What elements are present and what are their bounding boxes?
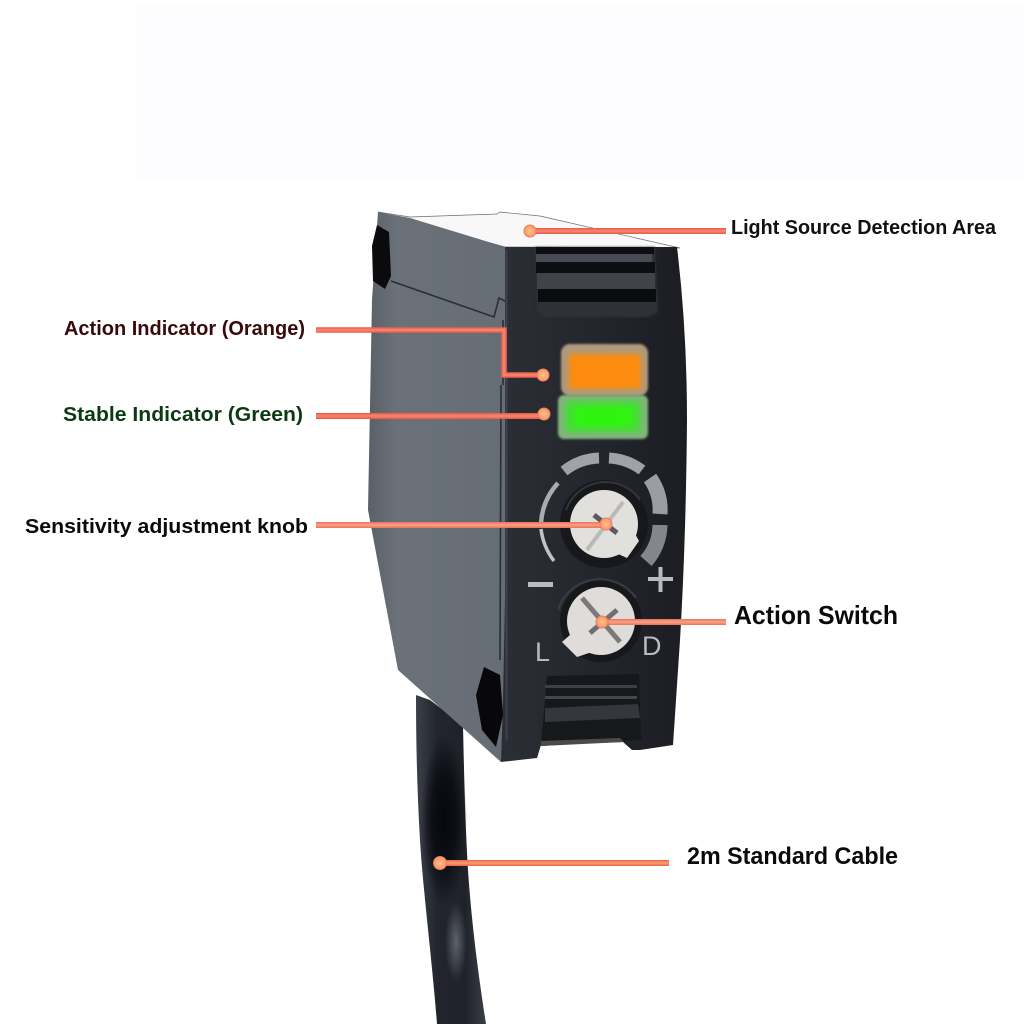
callout: light source detection area bbox=[524, 217, 997, 239]
side mounting hole top bbox=[372, 225, 391, 289]
sensitivity knob recess bbox=[560, 480, 648, 568]
green stable indicator bbox=[558, 395, 648, 439]
side face bbox=[368, 212, 507, 762]
faint background panel bbox=[136, 4, 1024, 178]
callout: sensitivity adjustment knob: Sensitivity adjustment knob bbox=[25, 515, 308, 538]
callout: 2m standard cable bbox=[433, 843, 898, 870]
D label: D bbox=[642, 631, 662, 661]
cable bbox=[416, 695, 486, 1024]
sensitivity scale arcs bbox=[541, 458, 660, 561]
callout: action indicator orange: Action Indicator (Orange) bbox=[64, 318, 305, 340]
callout: action switch: Action Switch bbox=[734, 600, 898, 630]
callout: stable indicator green: Stable Indicator (Green) bbox=[63, 404, 303, 426]
front left edge highlight bbox=[506, 250, 507, 740]
L label: L bbox=[535, 637, 550, 667]
action switch recess bbox=[558, 579, 642, 662]
action switch knob bbox=[562, 587, 635, 657]
side mounting hole bottom bbox=[476, 667, 503, 747]
orange action indicator bbox=[561, 344, 648, 396]
callout: sensitivity adjustment knob bbox=[25, 515, 612, 538]
plus sign bbox=[648, 567, 673, 592]
top face: light source detection area bbox=[378, 212, 680, 248]
sensitivity adjustment knob bbox=[570, 490, 639, 558]
front face bbox=[501, 247, 687, 762]
callout: 2m standard cable: 2m Standard Cable bbox=[687, 843, 898, 870]
minus sign bbox=[528, 582, 553, 587]
side seam bbox=[391, 281, 507, 660]
lower lens slots bbox=[541, 674, 641, 746]
callout: action indicator orange bbox=[64, 318, 550, 382]
callout: light source detection area: Light Source Detection Area bbox=[731, 217, 997, 239]
callout: action switch bbox=[596, 600, 898, 630]
upper lens slots bbox=[535, 247, 658, 317]
callout: stable indicator green bbox=[63, 404, 550, 426]
sensor body bbox=[368, 212, 687, 762]
